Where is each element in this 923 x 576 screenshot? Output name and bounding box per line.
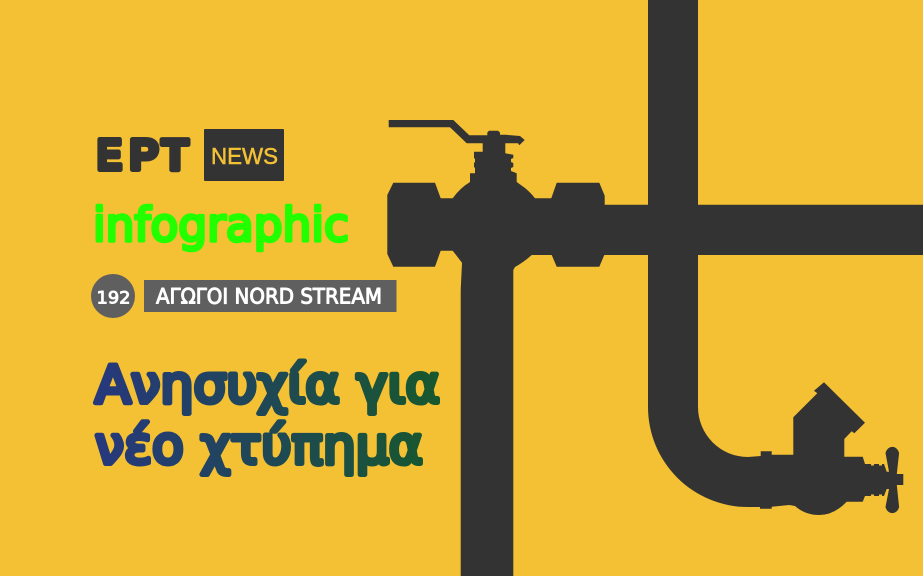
logo: ERT wordmark: Τ <box>162 130 189 180</box>
logo: ERT wordmark <box>97 130 189 180</box>
logo: NEWS badge: NEWS <box>211 143 278 169</box>
infographic label: infographic <box>93 198 349 252</box>
upper valve with handle and flanges <box>387 120 923 576</box>
vertical pipe with bend and lower valve <box>648 0 903 515</box>
main headline: νέο χτύπημα <box>95 416 423 476</box>
pipe illustration <box>387 0 923 576</box>
main headline: Ανησυχία για <box>95 356 440 416</box>
issue number badge: 192 <box>96 288 130 308</box>
logo: NEWS badge <box>204 129 284 181</box>
logo: ERT wordmark: Ρ <box>130 130 158 180</box>
category bar: ΑΓΩΓΟΙ NORD STREAM <box>156 284 382 308</box>
main headline <box>95 356 440 476</box>
logo: ERT wordmark: Ε <box>97 130 122 180</box>
issue number badge <box>91 274 135 318</box>
